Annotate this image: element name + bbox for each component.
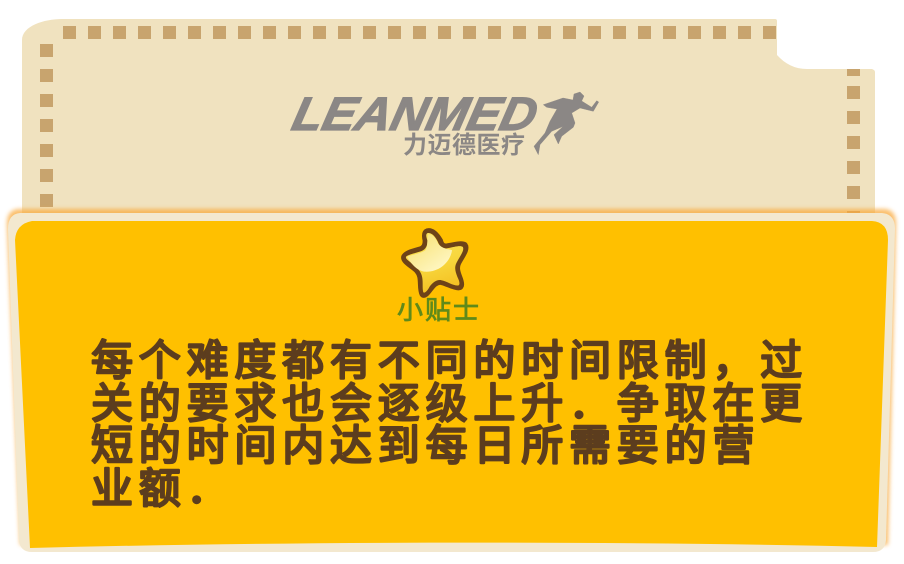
text block: tip body: 每个难度都有不同的时间限制，过: [91, 327, 808, 388]
logo Chinese name: 力迈德医疗: [403, 132, 525, 159]
label: tip heading: 小贴士: [397, 290, 481, 327]
icon: star: [404, 231, 466, 295]
panel: cream frame: [8, 213, 895, 552]
logo wordmark: LEANMED: [287, 89, 543, 141]
text block: tip body: 业额．: [91, 455, 234, 516]
panel: beige notched card: [22, 19, 875, 216]
panel glow: [7, 209, 896, 545]
text block: tip body: 短的时间内达到每日所需要的营: [91, 412, 760, 473]
panel: yellow tip area: [15, 221, 888, 548]
logo: LeanMed: [287, 89, 599, 159]
icon: running figure: [534, 92, 599, 155]
text block: tip body: 关的要求也会逐级上升．争取在更: [91, 370, 808, 431]
text block: tip body: [91, 327, 808, 516]
dotted border: [40, 26, 860, 217]
